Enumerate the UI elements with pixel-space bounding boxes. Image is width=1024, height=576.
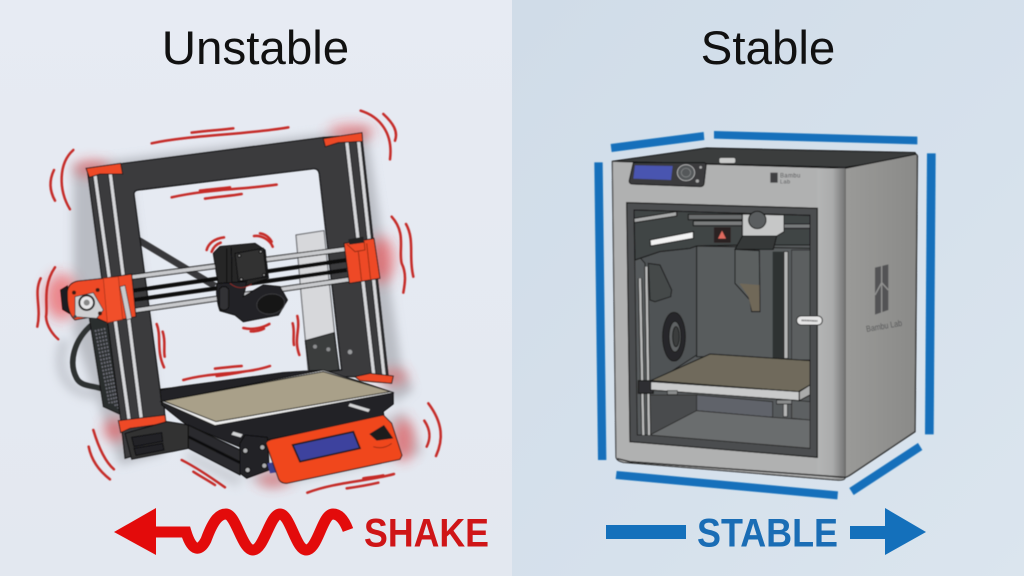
blue stability brackets [594,131,936,499]
orange corner brackets [86,133,393,433]
front logo: Lab [780,179,790,185]
left interior wall and fan [635,243,697,383]
rear silver plate [296,231,339,372]
side panel [845,154,917,477]
upper rear gantry [634,210,810,260]
door latch [797,316,822,325]
red vibration marks [37,111,441,493]
left guide rods [640,267,649,435]
front shell [612,161,845,480]
panel: stable background [512,0,1024,576]
side logo: Bambu Lab [865,318,903,334]
red warning label [714,227,731,243]
diagonal strap [138,240,215,286]
front right corner post [817,168,845,479]
handle on lid [719,158,736,163]
front logo [770,173,801,185]
side logo [865,264,903,334]
build plate [638,354,810,417]
power cable [73,324,103,389]
motion shadow behind frame [61,128,423,488]
left and right vertical rails [95,139,384,422]
illustration: stable enclosed printer [594,131,936,499]
right X-axis mount [344,237,380,283]
touchscreen control panel [629,163,706,187]
interior back wall [634,210,810,448]
label: STABLE: STABLE [697,512,838,556]
power supply [89,313,125,417]
orange LCD controller [266,415,402,483]
right interior column [773,250,810,360]
panel: unstable background [0,0,512,576]
arrow: blue left bar [606,525,686,539]
black frame [87,135,388,458]
illustration: shaking open-frame printer [37,111,441,493]
label: SHAKE: SHAKE [364,512,489,556]
bed carriage and Y-axis base [125,370,393,478]
toolhead [735,211,784,249]
front window frame [627,203,817,457]
extruder and fan [213,243,287,322]
left X-axis motor mount [61,274,136,323]
heading: Unstable: Unstable [162,22,349,75]
chamber lower walls and floor [648,395,810,448]
top lid [612,148,917,167]
central back panel [697,246,810,360]
bottom trim [617,459,845,477]
print bed [161,370,394,426]
front logo: Bambu [780,174,801,180]
arrow: blue right arrow [850,508,926,555]
horizontal rods [130,249,350,311]
PTFE chute with filament [735,249,760,312]
arrow: red wavy shake arrow [114,508,348,555]
heading: Stable: Stable [701,22,835,75]
red glow at shaking points [45,125,414,486]
